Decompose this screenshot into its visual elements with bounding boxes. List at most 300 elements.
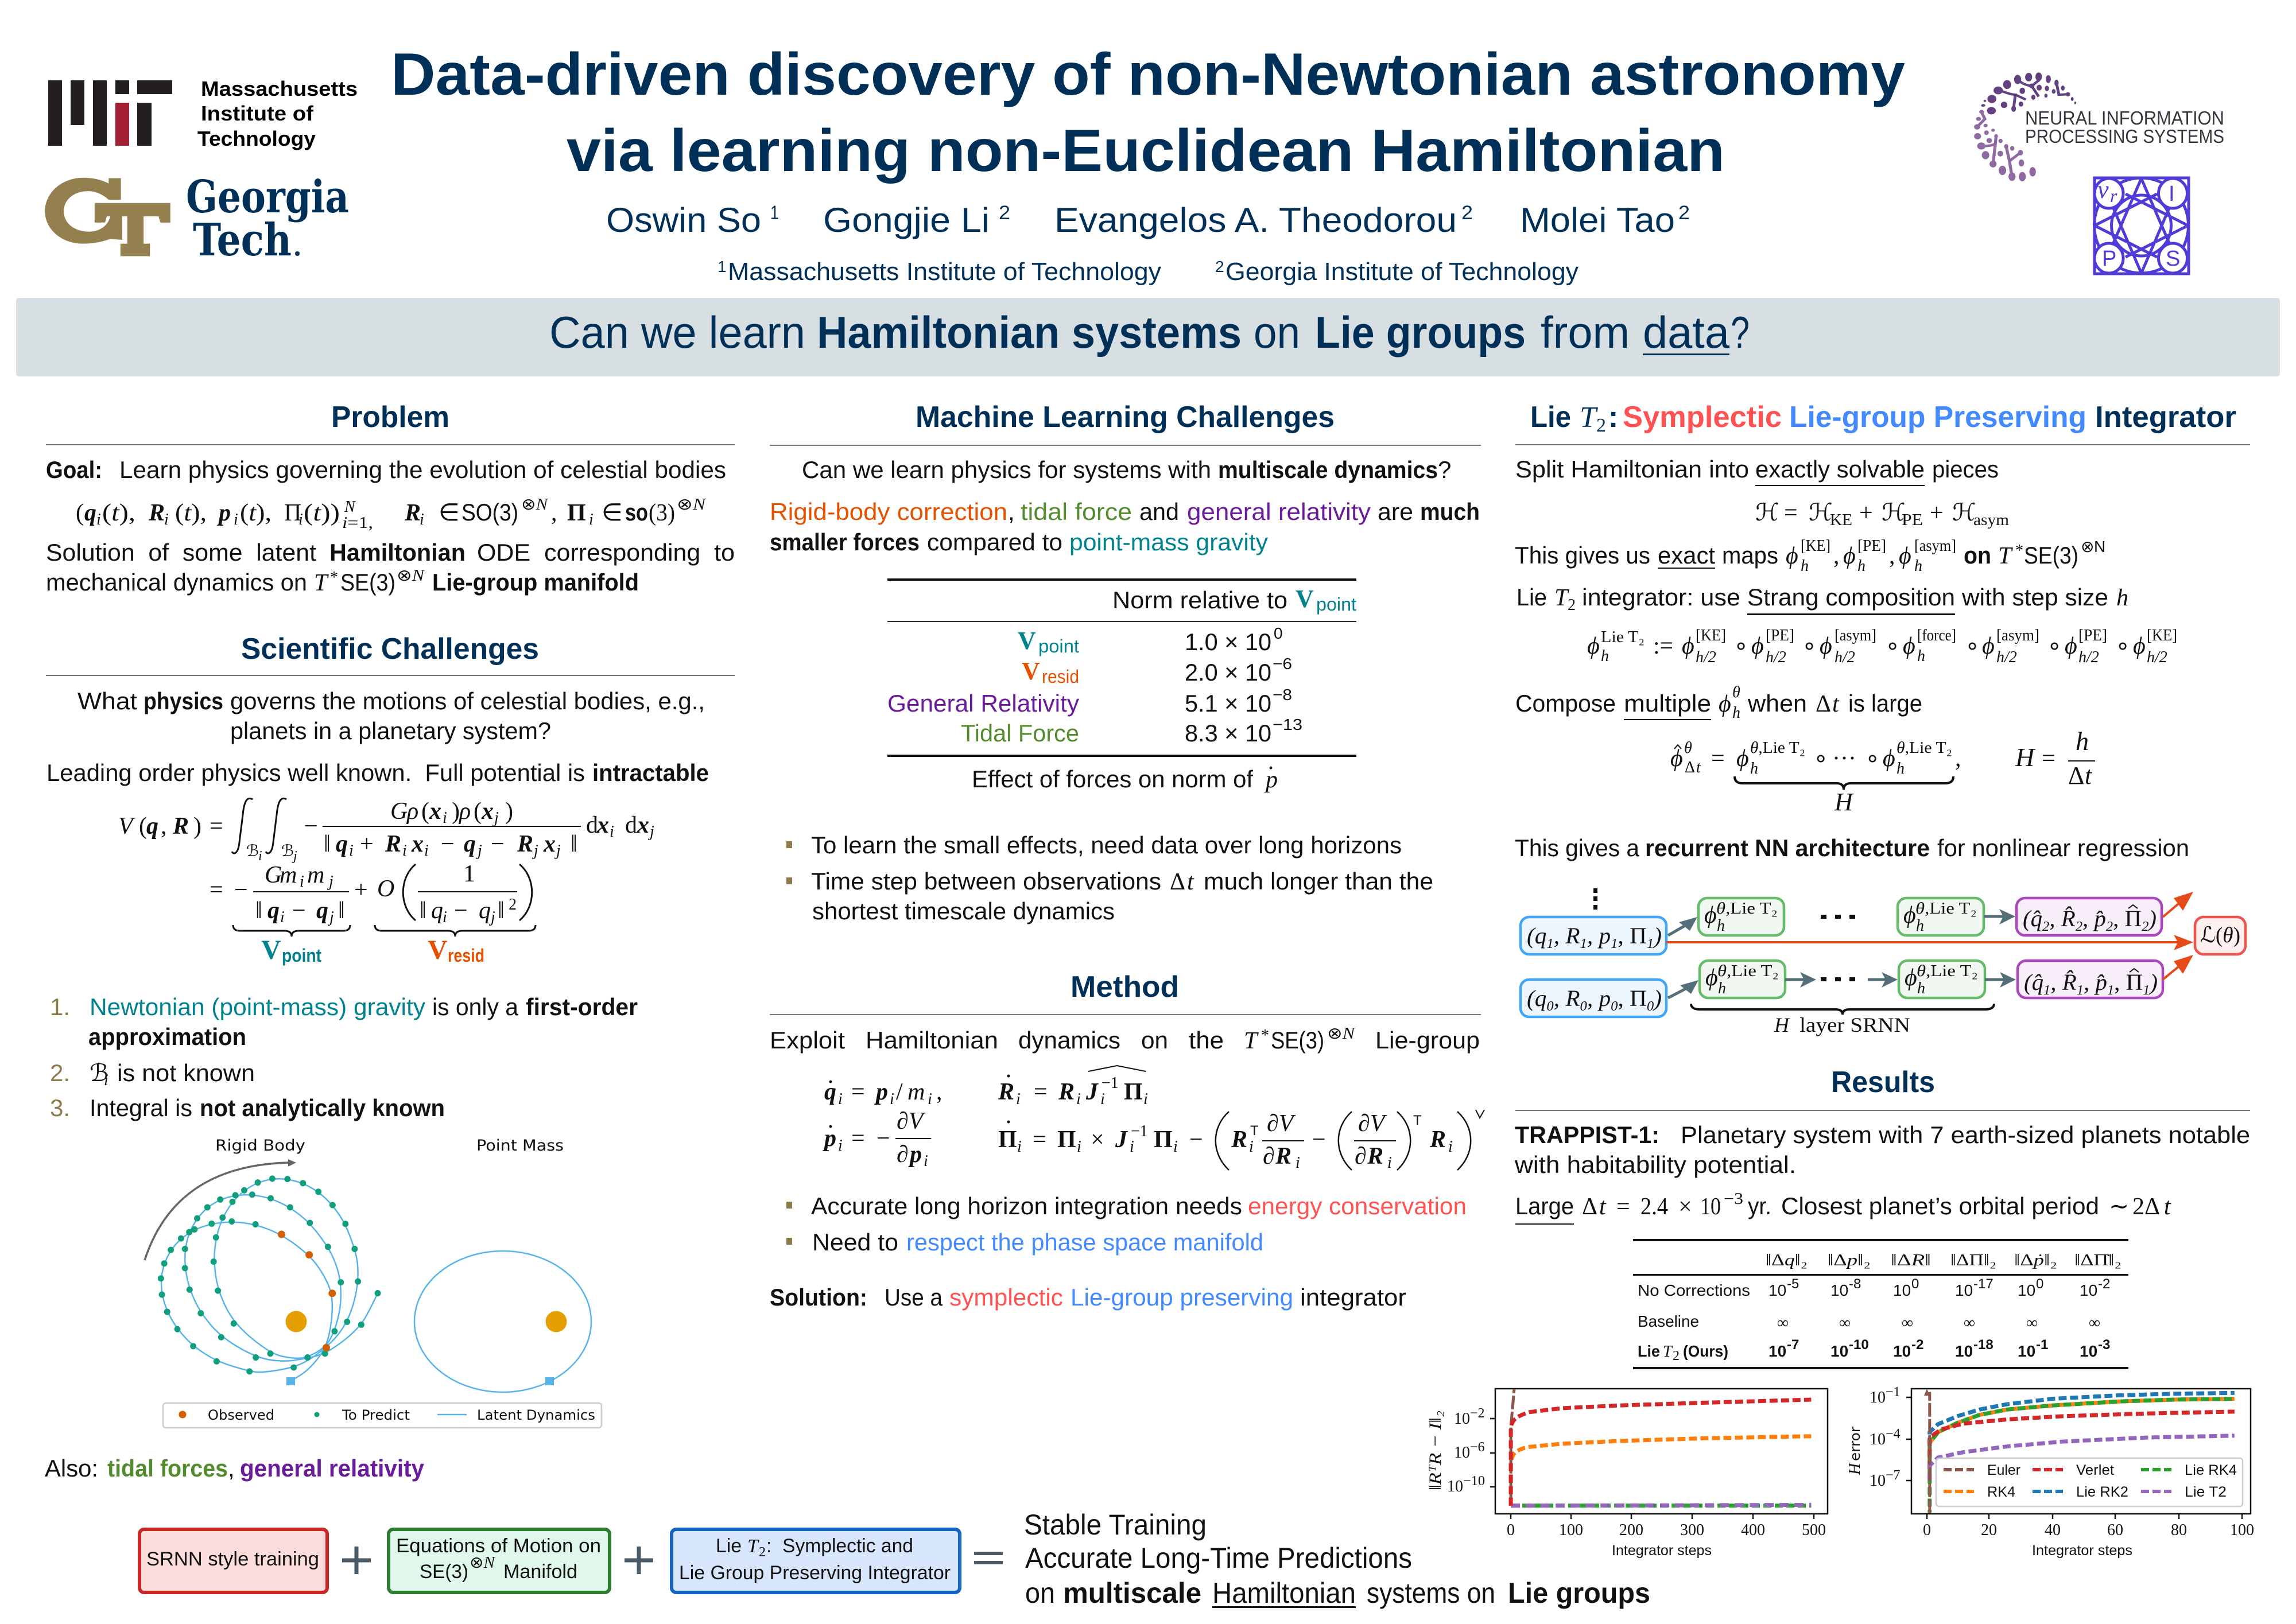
equations: Hamiltonian dynamics on Lie group: T bbox=[1413, 1113, 1422, 1128]
node: state 0: , p bbox=[1587, 985, 1611, 1011]
text: large time step: 2.4 bbox=[1640, 1194, 1668, 1220]
chart legend bbox=[163, 1403, 602, 1428]
summary equation bbox=[139, 1509, 1650, 1609]
equation: decomposition: G bbox=[265, 862, 282, 888]
node: state 1: 1 bbox=[1546, 937, 1554, 951]
text: leading order: Leading order physics well known. Full potential is bbox=[46, 759, 585, 786]
text: large time step: Closest planet’s orbital period bbox=[1781, 1192, 2099, 1219]
equation: Lie T2 Strang composition: ϕ bbox=[1682, 633, 1694, 659]
equations: Hamiltonian dynamics on Lie group: J bbox=[1115, 1126, 1128, 1153]
node: state 1: , p bbox=[1587, 923, 1611, 949]
text: large time step: t bbox=[2164, 1194, 2171, 1220]
numbered list: Newtonian (point-mass) gravity bbox=[90, 993, 425, 1020]
brace: V resid bbox=[375, 925, 536, 966]
text: compose multiple: is large bbox=[1848, 690, 1922, 717]
equation: Lie T2 Strang composition: ϕ bbox=[2133, 633, 2146, 659]
text: outcome: Stable Training bbox=[1024, 1509, 1207, 1541]
brace: V resid: resid bbox=[448, 945, 484, 966]
logo: Georgia Tech: Tech bbox=[193, 214, 292, 266]
bullet list: long horizons bbox=[786, 832, 1433, 924]
affiliations bbox=[718, 258, 1578, 286]
title: Data-driven discovery of non-Newtonian astronomy bbox=[391, 41, 1905, 108]
numbered list: 1. bbox=[50, 993, 70, 1020]
bullet list: long horizons: Δ bbox=[1170, 869, 1185, 895]
brace: V resid: V bbox=[428, 935, 448, 965]
equation: state variables: (t), bbox=[175, 500, 207, 526]
equation: Lie T2 Strang composition: h/2 bbox=[1996, 648, 2017, 666]
numbered list: is not known bbox=[117, 1059, 255, 1086]
equation: state variables bbox=[76, 496, 707, 532]
text: large time step bbox=[1515, 1190, 2171, 1225]
equation: Lie T2 Strang composition: h/2 bbox=[1696, 648, 1716, 666]
equation: composed map: h bbox=[2076, 726, 2089, 756]
equations: Hamiltonian dynamics on Lie group: , bbox=[936, 1079, 943, 1105]
text: smaller forces: much bbox=[1420, 498, 1480, 525]
bullet list: long horizons: Time step between observations bbox=[811, 868, 1161, 895]
table: force magnitudes: 1.0 × 10 bbox=[1185, 628, 1271, 655]
text: solution: integrator bbox=[1300, 1284, 1406, 1311]
text: Strang composition bbox=[1517, 584, 2128, 615]
node: state 1: (q bbox=[1527, 923, 1546, 949]
equation: Lie T2 Strang composition: ∘ bbox=[2115, 633, 2130, 659]
node: prediction 2: ) bbox=[2147, 906, 2157, 931]
box: equations of motion: SE(3) bbox=[420, 1561, 468, 1583]
equations: Hamiltonian dynamics on Lie group: −1 bbox=[1131, 1122, 1148, 1140]
bullet list: long horizons: shortest timescale dynamics bbox=[812, 898, 1115, 924]
text: exploit Hamiltonian dynamics: Hamiltonian bbox=[866, 1027, 998, 1054]
chart: rotation error: 0 bbox=[1507, 1521, 1515, 1539]
table: results: 10 bbox=[1768, 1342, 1786, 1360]
equation: potential integral: i bbox=[349, 842, 354, 860]
chart: rotation error: 300 bbox=[1680, 1521, 1704, 1539]
equation: decomposition: j bbox=[489, 908, 495, 926]
icon: plus bbox=[625, 1547, 653, 1574]
text: solution statement: Hamiltonian bbox=[329, 539, 466, 566]
chart: Hamiltonian error: 10 bbox=[1870, 1431, 1886, 1448]
heading: Lie T2 Symplectic Lie-group Preserving Integrator: Lie bbox=[1530, 401, 1571, 434]
table: results: ∞ bbox=[2026, 1314, 2038, 1332]
box: Lie T2 integrator: 2 bbox=[759, 1545, 766, 1560]
equations: Hamiltonian dynamics on Lie group: ∂ bbox=[897, 1141, 909, 1168]
equation: Hamiltonian split bbox=[1755, 500, 2009, 529]
heading: Lie T2 Symplectic Lie-group Preserving Integrator: 2 bbox=[1596, 415, 1606, 436]
chart: Hamiltonian error: Integrator steps bbox=[2032, 1543, 2132, 1559]
numbered list: 3. bbox=[50, 1094, 70, 1121]
equation: potential integral: − bbox=[491, 831, 505, 857]
table: results: T bbox=[1663, 1343, 1673, 1361]
text: question: planets in a planetary system? bbox=[230, 717, 551, 744]
equation: composed map: Δ bbox=[1685, 759, 1695, 776]
text: smaller forces: smaller forces bbox=[770, 529, 920, 555]
table: force magnitudes: −8 bbox=[1273, 686, 1292, 704]
text: large time step: −3 bbox=[1724, 1190, 1743, 1208]
text: exact maps: ⊗ bbox=[2081, 538, 2094, 556]
chart: rotation error: −6 bbox=[1470, 1440, 1485, 1455]
equation: state variables: (3) bbox=[649, 500, 675, 526]
numbered list bbox=[50, 993, 638, 1121]
text: recurrent NN architecture: recurrent NN architecture bbox=[1645, 834, 1930, 861]
node: integrator layer top left: ϕ bbox=[1704, 902, 1717, 928]
text: exact maps: , bbox=[1889, 543, 1895, 569]
table: results: ‖Δq‖₂ bbox=[1766, 1252, 1808, 1269]
table: results: No Corrections bbox=[1638, 1281, 1750, 1299]
affiliations: Georgia Institute of Technology bbox=[1225, 258, 1578, 286]
box: equations of motion: Equations of Motion on bbox=[396, 1535, 601, 1557]
equations: Hamiltonian dynamics on Lie group: × bbox=[1091, 1126, 1104, 1153]
equation: decomposition: O bbox=[377, 876, 394, 902]
node: prediction 1: 1 bbox=[2107, 983, 2114, 998]
brace: V point bbox=[233, 925, 350, 966]
heading: Lie T2 Symplectic Lie-group Preserving Integrator: Integrator bbox=[2095, 401, 2236, 434]
equation: decomposition: q bbox=[431, 898, 443, 924]
equation: composed map: t bbox=[2085, 762, 2093, 790]
text: question: What bbox=[77, 687, 137, 714]
box: equations of motion: Manifold bbox=[503, 1561, 577, 1583]
chart legend: integrators: Euler bbox=[1987, 1462, 2020, 1478]
table: force magnitudes: point bbox=[1038, 636, 1079, 656]
logo: Georgia Tech bbox=[45, 171, 349, 266]
text: multiscale question: Can we learn physics for systems with bbox=[802, 456, 1211, 483]
equation: composed map: θ bbox=[1684, 739, 1692, 757]
text: Strang composition: with step size bbox=[1961, 584, 2108, 611]
chart legend: integrators: RK4 bbox=[1987, 1484, 2015, 1500]
table: results: 0 bbox=[2036, 1276, 2043, 1292]
text: exact maps: [PE] bbox=[1857, 537, 1886, 555]
panel: Problem bbox=[46, 401, 735, 596]
node: integrator layer bottom left: θ,Lie T₂ bbox=[1717, 962, 1779, 980]
text: solution bbox=[770, 1284, 1406, 1311]
equations: Hamiltonian dynamics on Lie group: − bbox=[1189, 1126, 1203, 1153]
text: exploit Hamiltonian dynamics bbox=[770, 1025, 1480, 1054]
equation: composed map: ϕ bbox=[1670, 745, 1683, 772]
chart: rotation error bbox=[1426, 1389, 1828, 1559]
equation: composed map: t bbox=[1696, 759, 1701, 776]
node: prediction 1: ) bbox=[2148, 969, 2158, 995]
equation: potential integral: x bbox=[429, 798, 441, 825]
affiliations: 2 bbox=[1215, 258, 1224, 275]
text: Strang composition: T bbox=[1554, 585, 1569, 611]
equation: potential integral: R bbox=[385, 831, 401, 857]
text: recurrent NN architecture: This gives a bbox=[1515, 834, 1640, 861]
equations: Hamiltonian dynamics on Lie group: i bbox=[1249, 1138, 1254, 1156]
equation: potential integral: i bbox=[443, 809, 447, 827]
logo: Georgia Tech: Georgia bbox=[186, 171, 349, 223]
title: via learning non-Euclidean Hamiltonian bbox=[567, 118, 1725, 184]
equation: Lie T2 Strang composition: ∘ bbox=[2047, 633, 2062, 659]
text: smaller forces: compared to bbox=[927, 529, 1062, 555]
equations: Hamiltonian dynamics on Lie group: R bbox=[1275, 1143, 1292, 1170]
node: state 1: , R bbox=[1554, 923, 1580, 949]
node: prediction 2: 2 bbox=[2042, 919, 2049, 934]
logo: MIT: Massachusetts bbox=[201, 77, 358, 100]
text: solution statement: ODE corresponding to bbox=[477, 539, 735, 566]
text: exact maps: h bbox=[1857, 557, 1865, 575]
bullet list: integration needs bbox=[786, 1192, 1467, 1256]
equations: Hamiltonian dynamics on Lie group: ∂ bbox=[1263, 1143, 1275, 1170]
table: force magnitudes: resid bbox=[1042, 666, 1079, 687]
equation: decomposition: ‖ bbox=[338, 898, 345, 924]
bullet list: long horizons: t bbox=[1187, 869, 1194, 895]
equation: potential integral: q bbox=[336, 831, 348, 857]
equation: composed map: ∘ bbox=[1865, 745, 1880, 772]
node: integrator layer bottom right bbox=[1899, 961, 1985, 998]
equation: composed map: θ,Lie T₂ bbox=[1750, 739, 1805, 757]
table: force magnitudes: 0 bbox=[1274, 624, 1283, 642]
chart: rotation error: −10 bbox=[1463, 1474, 1485, 1489]
table: force magnitudes: 5.1 × 10 bbox=[1185, 690, 1271, 717]
equation: state variables: i=1, bbox=[342, 514, 373, 532]
text: solution statement: T bbox=[314, 570, 329, 596]
node: integrator layer top right: h bbox=[1916, 917, 1924, 935]
text: exploit Hamiltonian dynamics: SE(3) bbox=[1271, 1027, 1324, 1054]
equation: state variables: (t)) bbox=[304, 500, 340, 526]
equation: potential integral: q bbox=[464, 831, 476, 857]
node: integrator layer bottom left bbox=[1700, 961, 1785, 998]
equation: decomposition: − bbox=[292, 898, 306, 924]
node: prediction 1: (q̂ bbox=[2024, 969, 2043, 995]
logo: Neural Information Processing Systems: NEURAL INFORMATION bbox=[2025, 107, 2224, 129]
chart: rotation error: Integrator steps bbox=[1612, 1543, 1712, 1559]
chart: Hamiltonian error: −7 bbox=[1886, 1468, 1901, 1483]
text: also tidal forces, general relativity: , bbox=[228, 1455, 235, 1482]
table: results: 10 bbox=[1955, 1342, 1973, 1360]
equation: state variables: i bbox=[234, 511, 238, 529]
text: exact maps: exact bbox=[1658, 542, 1715, 569]
node: integrator layer top right: ϕ bbox=[1903, 902, 1916, 928]
equation: Hamiltonian split: = bbox=[1784, 500, 1798, 526]
equation: potential integral: x bbox=[411, 831, 424, 857]
equation: state variables: ⊗N bbox=[521, 496, 548, 514]
equations: Hamiltonian dynamics on Lie group: i bbox=[1076, 1090, 1081, 1108]
text: exploit Hamiltonian dynamics: Exploit bbox=[770, 1027, 845, 1054]
node: prediction 2: (q̂ bbox=[2023, 906, 2042, 931]
equation: decomposition bbox=[210, 861, 532, 926]
node: state 1: 1 bbox=[1611, 937, 1618, 951]
node: prediction 1 bbox=[2018, 961, 2163, 998]
equations: Hamiltonian dynamics on Lie group bbox=[823, 1066, 1484, 1172]
equation: decomposition: q bbox=[316, 898, 328, 924]
text: large time step: 10 bbox=[1700, 1194, 1721, 1220]
equations: Hamiltonian dynamics on Lie group: i bbox=[838, 1137, 843, 1155]
logo: Neural Information Processing Systems: PROCESSING SYSTEMS bbox=[2025, 126, 2224, 147]
text: large time step: yr. bbox=[1748, 1192, 1771, 1219]
equation: Hamiltonian split: + bbox=[1859, 500, 1873, 526]
equation: state variables: Π bbox=[567, 500, 586, 526]
text: exact maps: h bbox=[1801, 557, 1809, 575]
box: Lie T2 integrator: Lie Group Preserving Integrator bbox=[679, 1562, 951, 1584]
authors bbox=[606, 201, 1690, 239]
table: results: -2 bbox=[1911, 1337, 1923, 1353]
text: compose multiple bbox=[1515, 683, 1922, 722]
equation: composed map bbox=[1670, 726, 2095, 816]
table: results: 10 bbox=[2018, 1281, 2035, 1299]
box: SRNN style training: SRNN style training bbox=[146, 1548, 319, 1570]
arrows: state flow bbox=[1668, 909, 2016, 998]
equation: Lie T2 Strang composition: ϕ bbox=[1903, 633, 1915, 659]
table: results: 10 bbox=[1955, 1281, 1973, 1299]
node: prediction 2 bbox=[2016, 898, 2162, 935]
equation: potential integral: − bbox=[441, 831, 455, 857]
table: force magnitudes: Norm relative to bbox=[1112, 586, 1287, 613]
numbered list: first-order bbox=[526, 993, 638, 1020]
text: Strang composition: integrator: use bbox=[1582, 584, 1740, 611]
equation: potential integral: ‖ bbox=[324, 831, 331, 857]
bullet list: integration needs: Need to bbox=[812, 1229, 898, 1256]
equation: Lie T2 Strang composition: ∘ bbox=[1802, 633, 1817, 659]
equations: Hamiltonian dynamics on Lie group: p bbox=[908, 1141, 922, 1168]
equation: potential integral: ) bbox=[452, 798, 460, 825]
equation: composed map: ϕ bbox=[1736, 745, 1749, 772]
node: state 0: , R bbox=[1554, 985, 1580, 1011]
table: results: 2 bbox=[1673, 1349, 1680, 1363]
heading: Lie T2 Symplectic Lie-group Preserving Integrator bbox=[1530, 401, 2236, 436]
chart: rigid body vs point mass orbits bbox=[145, 1137, 602, 1428]
equation: state variables: i bbox=[96, 511, 101, 529]
box: Lie T2 integrator bbox=[672, 1529, 960, 1592]
table: results: ‖ΔΠ‖₂ bbox=[1950, 1252, 1996, 1269]
equation: decomposition: q bbox=[479, 898, 491, 924]
equation: state variables: (t), bbox=[102, 500, 135, 526]
equations: Hamiltonian dynamics on Lie group: = bbox=[851, 1125, 865, 1152]
text: smaller forces: tidal force bbox=[1021, 498, 1132, 525]
text: solution: Use a bbox=[885, 1284, 943, 1311]
equations: Hamiltonian dynamics on Lie group: i bbox=[1077, 1138, 1081, 1156]
equation: potential integral: R bbox=[172, 813, 189, 840]
equation: state variables: R bbox=[148, 500, 165, 526]
equation: Lie T2 Strang composition: ∘ bbox=[1733, 633, 1748, 659]
node: state 0: (q bbox=[1527, 985, 1546, 1011]
equation: composed map: Δ bbox=[2068, 762, 2084, 790]
equations: Hamiltonian dynamics on Lie group: − bbox=[876, 1125, 890, 1152]
equation: potential integral: d bbox=[586, 812, 598, 838]
table: results: ‖ΔΠ̇‖₂ bbox=[2074, 1252, 2122, 1269]
box: Lie T2 integrator: Lie bbox=[716, 1535, 742, 1557]
text: recurrent NN architecture bbox=[1515, 834, 2189, 861]
text: leading order: intractable bbox=[592, 759, 709, 786]
equation: potential integral: ( bbox=[139, 813, 147, 840]
equation: potential integral: i bbox=[402, 842, 407, 860]
authors: 1 bbox=[770, 202, 779, 224]
chart legend: integrators: Verlet bbox=[2076, 1462, 2114, 1478]
node: state 1: , Π bbox=[1618, 923, 1647, 949]
equation: potential integral: j bbox=[532, 842, 538, 860]
equation: potential integral: x bbox=[637, 812, 649, 838]
chart: Hamiltonian error: 10 bbox=[1870, 1472, 1886, 1490]
equation: Lie T2 Strang composition: ∘ bbox=[1965, 633, 1980, 659]
heading: Machine Learning Challenges: Machine Learning Challenges bbox=[916, 401, 1335, 434]
equation: potential integral: V bbox=[118, 813, 135, 840]
equations: Hamiltonian dynamics on Lie group: / bbox=[896, 1079, 903, 1105]
text: also tidal forces, general relativity: Also: bbox=[45, 1455, 98, 1482]
equation: state variables: ( bbox=[76, 500, 84, 526]
equation: state variables: i bbox=[420, 511, 424, 529]
node: integrator layer top left: θ,Lie T₂ bbox=[1716, 900, 1778, 918]
table: results bbox=[1633, 1239, 2128, 1369]
equation: composed map: , bbox=[1955, 745, 1961, 772]
equation: decomposition: j bbox=[327, 873, 333, 891]
table: force magnitudes: 8.3 × 10 bbox=[1185, 720, 1271, 747]
text: goal: Goal: bbox=[46, 456, 102, 483]
table: results: (Ours) bbox=[1683, 1342, 1728, 1360]
equation: Hamiltonian split: + bbox=[1930, 500, 1944, 526]
chart: Hamiltonian error: 40 bbox=[2045, 1521, 2061, 1539]
equation: decomposition: ‖ bbox=[498, 898, 505, 924]
text: smaller forces: Rigid-body correction bbox=[770, 498, 1007, 525]
table: results: 10 bbox=[1768, 1281, 1786, 1299]
chart: rigid body vs point mass orbits: Point Mass bbox=[476, 1137, 564, 1155]
equation: composed map: θ,Lie T₂ bbox=[1896, 739, 1952, 757]
ellipsis: top row bbox=[1821, 915, 1855, 919]
text: multiscale question: multiscale dynamics bbox=[1218, 456, 1438, 483]
equations: Hamiltonian dynamics on Lie group: = bbox=[851, 1079, 865, 1105]
equation: Hamiltonian split: asym bbox=[1973, 511, 2009, 529]
node: state 1: ) bbox=[1653, 923, 1662, 949]
node: integrator layer bottom right: h bbox=[1917, 980, 1925, 997]
table: force magnitudes bbox=[887, 578, 1356, 793]
table: results: -18 bbox=[1973, 1337, 1994, 1353]
node: prediction 1: , p̂ bbox=[2084, 969, 2107, 995]
equation: Lie T2 Strang composition: ϕ bbox=[1587, 633, 1600, 659]
chart: rotation error: 100 bbox=[1559, 1521, 1583, 1539]
equation: decomposition: ‖ bbox=[255, 898, 262, 924]
logo: MIT: Institute of bbox=[201, 102, 314, 125]
node: state 1: 1 bbox=[1580, 937, 1587, 951]
brace: H layer SRNN bbox=[1691, 1004, 1994, 1036]
table: results: 10 bbox=[2080, 1281, 2097, 1299]
numbered list: Integral is bbox=[90, 1094, 192, 1121]
logo: vrIPS: I bbox=[2169, 182, 2175, 206]
equation: state variables: ∈ bbox=[602, 500, 623, 526]
table: force magnitudes: V bbox=[1296, 585, 1314, 613]
equation: Lie T2 Strang composition: [PE] bbox=[2078, 627, 2107, 644]
equation: decomposition: 1 bbox=[463, 861, 475, 887]
equation: state variables: , bbox=[551, 500, 557, 526]
ellipsis: bottom row bbox=[1821, 977, 1855, 981]
chart: Hamiltonian error: 80 bbox=[2171, 1521, 2187, 1539]
logo: vrIPS: S bbox=[2166, 247, 2180, 271]
text: smaller forces: point-mass gravity bbox=[1069, 529, 1268, 555]
text: TRAPPIST-1: with habitability potential. bbox=[1514, 1151, 1796, 1178]
text: smaller forces bbox=[770, 498, 1480, 555]
banner: central question: data bbox=[1643, 307, 1730, 358]
bullet list: long horizons: To learn the small effects, need data over long horizons bbox=[811, 832, 1402, 858]
text: solution statement: SE(3) bbox=[340, 569, 395, 596]
equation: state variables: i bbox=[298, 511, 303, 529]
box: equations of motion bbox=[389, 1529, 610, 1592]
equations: Hamiltonian dynamics on Lie group: i bbox=[1016, 1090, 1021, 1108]
chart: rotation error: 10 bbox=[1454, 1444, 1470, 1462]
node: integrator layer bottom right: ϕ bbox=[1905, 965, 1917, 991]
table: force magnitudes: V bbox=[1022, 657, 1040, 685]
equation: composed map: h bbox=[1750, 760, 1758, 778]
text: compose multiple: ϕ bbox=[1719, 691, 1731, 717]
equation: potential integral: j bbox=[554, 842, 561, 860]
chart: Hamiltonian error: 10 bbox=[1870, 1389, 1886, 1407]
table: force magnitudes: V bbox=[1018, 627, 1036, 655]
equation: composed map: ∘ bbox=[1813, 745, 1828, 772]
text: split Hamiltonian: pieces bbox=[1932, 456, 1999, 483]
equations: Hamiltonian dynamics on Lie group: R bbox=[998, 1079, 1014, 1105]
chart: Hamiltonian error: 100 bbox=[2230, 1521, 2254, 1539]
equations: Hamiltonian dynamics on Lie group: −1 bbox=[1102, 1074, 1119, 1092]
text: exact maps: ϕ bbox=[1786, 543, 1798, 569]
equation: Hamiltonian split: ℋ bbox=[1952, 500, 1976, 526]
equation: potential integral: j bbox=[648, 823, 654, 841]
table: results: Lie bbox=[1638, 1342, 1660, 1360]
chart legend: integrators: Lie RK2 bbox=[2076, 1484, 2128, 1500]
equation: decomposition: j bbox=[328, 908, 334, 926]
equations: Hamiltonian dynamics on Lie group: − bbox=[1312, 1126, 1326, 1153]
